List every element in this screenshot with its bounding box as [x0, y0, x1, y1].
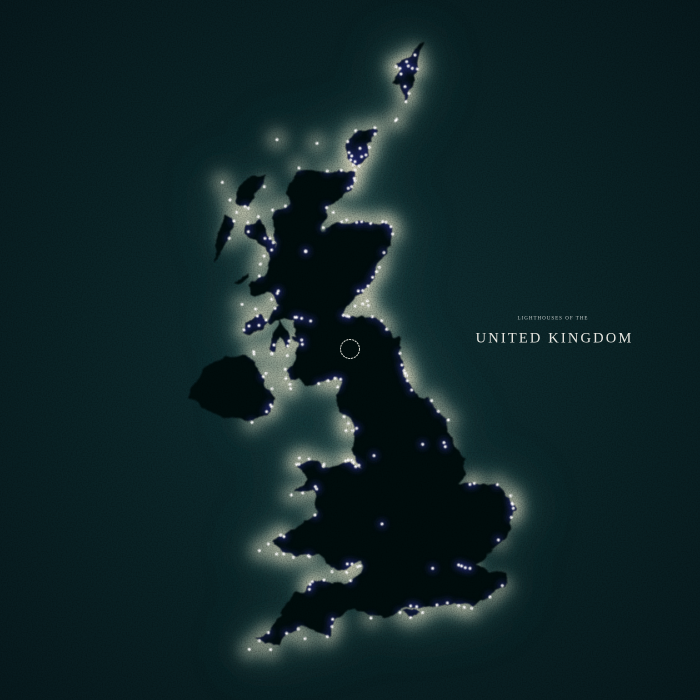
subtitle: LIGHTHOUSES OF THE: [518, 316, 588, 322]
marker: ring on Scotland: [340, 340, 360, 358]
glow: bright cream light along the coast: [221, 54, 515, 651]
glow: wide teal halo around the coast: [221, 54, 515, 651]
glow: blue light on the land near lighthouses: [221, 54, 515, 651]
title block: [476, 316, 633, 346]
lighthouse lights: [221, 54, 515, 651]
land: Great Britain and Northern Ireland: [188, 43, 513, 645]
glow: mid teal halo: [221, 54, 515, 651]
title: UNITED KINGDOM: [476, 330, 633, 346]
